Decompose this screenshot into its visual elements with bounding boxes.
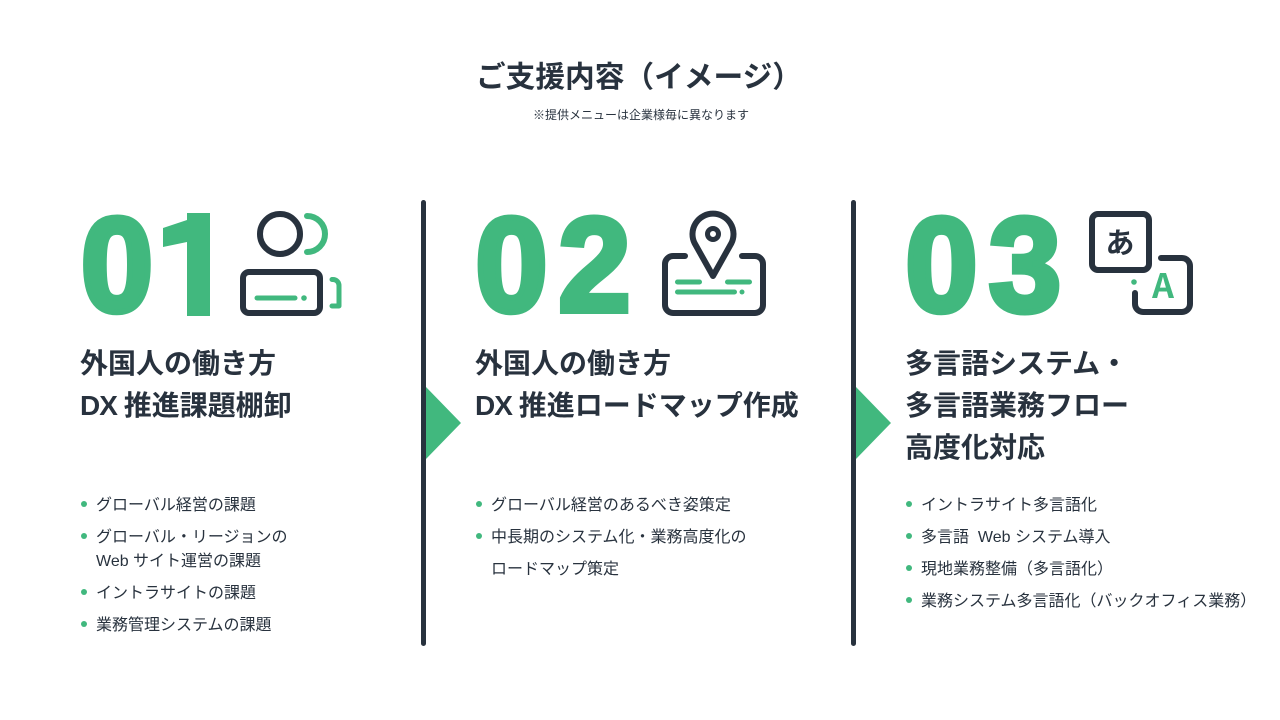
bullet list: 多言語 Web システム導入 [921, 529, 1110, 546]
divider 2 [851, 200, 856, 646]
heading: 外国人の働き方 [80, 348, 276, 379]
heading: DX 推進課題棚卸 [80, 390, 292, 421]
number 03 [905, 205, 1061, 325]
divider 1 [421, 200, 426, 646]
bullet list: 業務管理システムの課題 [96, 617, 272, 634]
title: ご支援内容（イメージ） [476, 61, 802, 94]
heading: 外国人の働き方 [475, 348, 671, 379]
number 01 [81, 205, 210, 325]
bullet list: ロードマップ策定 [491, 561, 619, 578]
heading [80, 348, 292, 421]
icon: map pin [662, 210, 766, 316]
arrow 2 [856, 387, 891, 459]
bullet list [81, 496, 288, 634]
heading: 多言語業務フロー [905, 390, 1129, 421]
arrow 1 [426, 387, 461, 459]
bullet list: イントラサイト多言語化 [921, 497, 1097, 514]
bullet list: Web サイト運営の課題 [96, 553, 261, 570]
heading: 多言語システム・ [905, 348, 1128, 379]
heading [905, 348, 1129, 463]
bullet list: 業務システム多言語化（バックオフィス業務） [921, 593, 1256, 610]
bullet list: グローバル経営のあるべき姿策定 [491, 497, 731, 514]
number 02 [475, 205, 631, 325]
heading [475, 348, 799, 421]
bullet list: イントラサイトの課題 [96, 585, 256, 602]
icon: translation: A [1151, 259, 1174, 308]
subtitle note: ※提供メニューは企業様毎に異なります [533, 108, 749, 122]
bullet list: 現地業務整備（多言語化） [921, 561, 1113, 578]
panel: step 02 [475, 205, 799, 578]
bullet list: 中長期のシステム化・業務高度化の [491, 529, 747, 546]
heading: DX 推進ロードマップ作成 [475, 390, 799, 421]
bullet list: グローバル・リージョンの [96, 529, 288, 546]
icon: translation [1089, 211, 1193, 315]
icon: translation: あ [1105, 228, 1135, 260]
icon: person and device [240, 211, 342, 316]
panel: step 03 [905, 205, 1256, 610]
bullet list: グローバル経営の課題 [96, 497, 256, 514]
bullet list [476, 496, 747, 578]
heading: 高度化対応 [905, 432, 1045, 463]
panel: step 01 [80, 205, 342, 634]
bullet list [906, 496, 1256, 610]
